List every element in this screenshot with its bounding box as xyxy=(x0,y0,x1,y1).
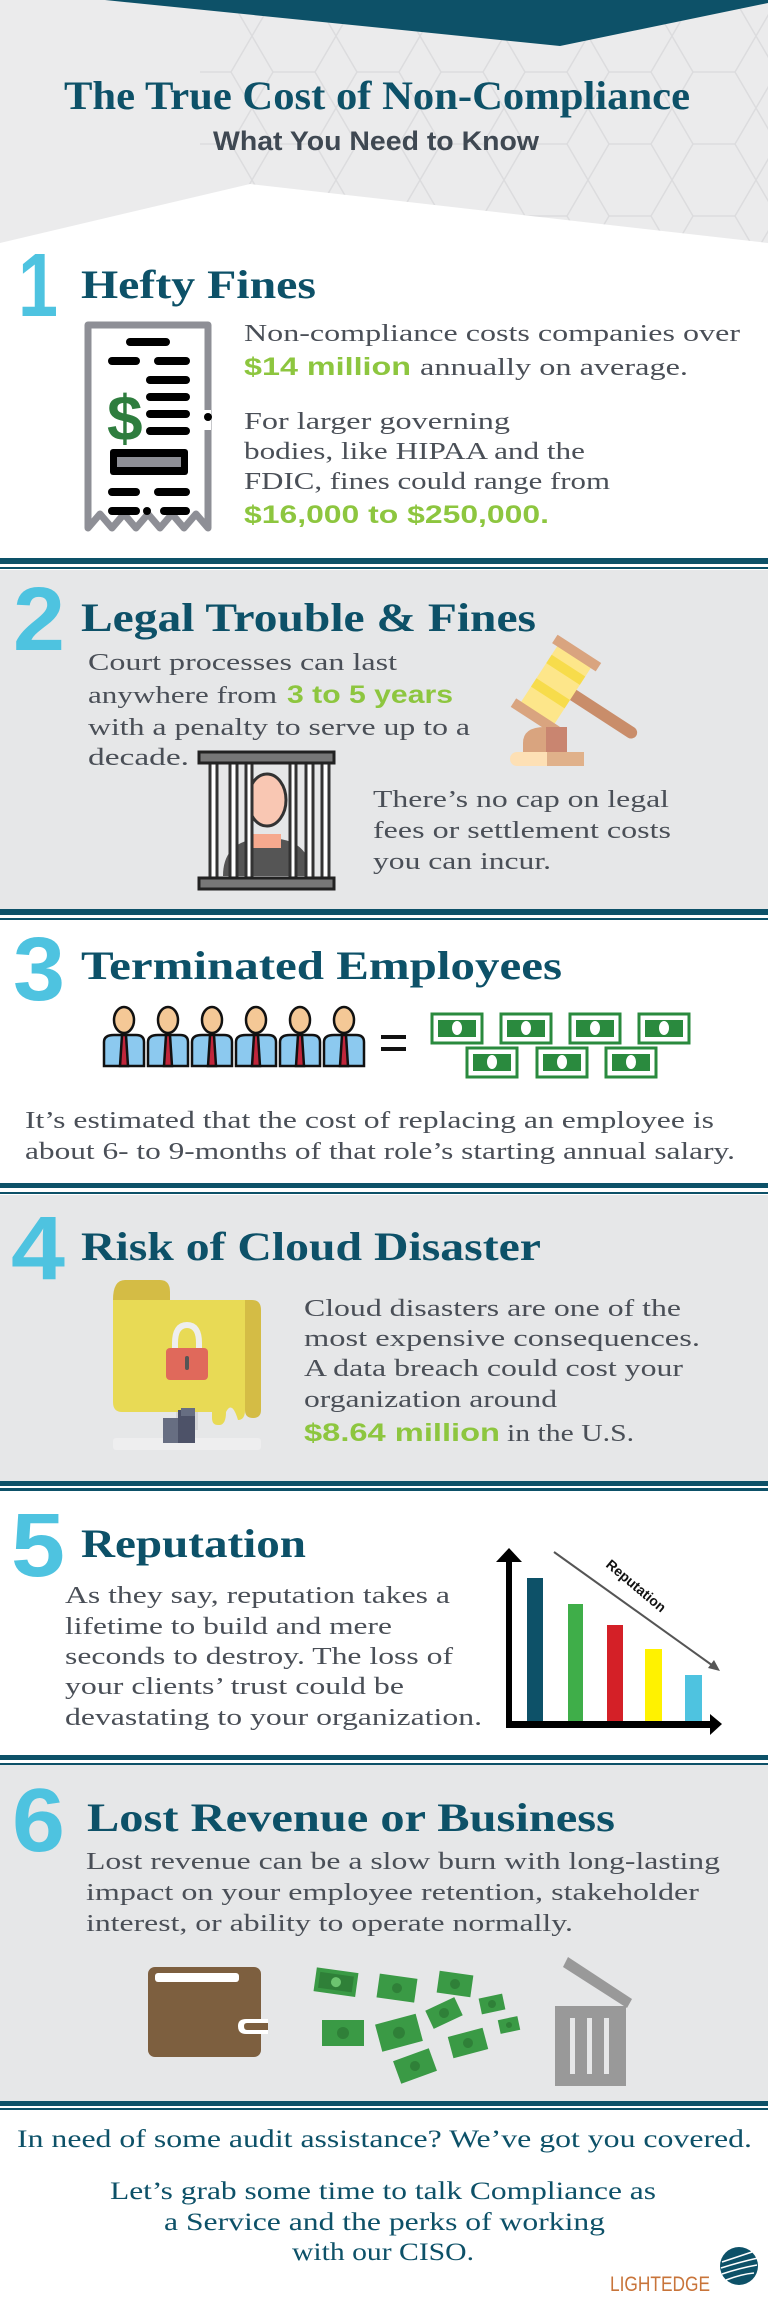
number 5: 5 xyxy=(11,1496,65,1596)
text block: reputation: seconds to destroy. The loss of xyxy=(65,1644,453,1670)
text block: reputation xyxy=(65,1583,482,1731)
text block: replacement cost: It’s estimated that the cost of replacing an employee is xyxy=(25,1108,714,1134)
title: The True Cost of Non-Compliance xyxy=(64,73,690,118)
text block: fines: $16,000 to $250,000. xyxy=(244,501,549,529)
text block: data breach: Cloud disasters are one of the xyxy=(304,1296,681,1322)
icon: jail xyxy=(199,752,334,889)
text block: fines: FDIC, fines could range from xyxy=(244,469,610,495)
text block: replacement cost: about 6- to 9-months of that role’s starting annual salary. xyxy=(25,1139,735,1165)
text block: reputation: your clients’ trust could be xyxy=(65,1674,404,1700)
text block: court: Court processes can last xyxy=(88,650,397,676)
footer: call to action: with our CISO. xyxy=(292,2239,474,2266)
text block: fines: annually on average. xyxy=(420,355,688,381)
text block: legal fees xyxy=(373,787,671,875)
icon: money stacks xyxy=(432,1014,689,1077)
icon: trash can xyxy=(555,1957,632,2086)
number 1: 1 xyxy=(18,236,58,336)
text block: data breach: A data breach could cost your xyxy=(304,1356,683,1382)
subtitle: What You Need to Know xyxy=(213,126,540,156)
number 2: 2 xyxy=(13,570,65,670)
equals sign xyxy=(381,1035,406,1051)
text block: data breach: $8.64 million xyxy=(304,1419,500,1447)
text block: reputation: lifetime to build and mere xyxy=(65,1614,392,1640)
heading: lost revenue: Lost Revenue or Business xyxy=(87,1795,615,1840)
number 4: 4 xyxy=(11,1199,65,1299)
text block: replacement cost xyxy=(25,1108,735,1165)
heading: cloud disaster: Risk of Cloud Disaster xyxy=(81,1224,541,1269)
text block: fines: For larger governing xyxy=(244,409,510,435)
icon: gavel xyxy=(510,635,659,773)
text block: court: anywhere from xyxy=(88,683,277,709)
footer: call to action: a Service and the perks of working xyxy=(164,2209,606,2236)
number 3: 3 xyxy=(13,920,65,1020)
text block: court: decade. xyxy=(88,745,189,771)
panel: reputation xyxy=(0,1491,768,1755)
text block: court: 3 to 5 years xyxy=(287,681,453,709)
header background xyxy=(0,0,768,250)
text block: lost revenue xyxy=(86,1849,720,1937)
text block: data breach: organization around xyxy=(304,1387,557,1413)
footer: call to action: Let’s grab some time to talk Compliance as xyxy=(110,2178,656,2205)
footer: call to action xyxy=(17,2126,752,2266)
text block: legal fees: fees or settlement costs xyxy=(373,818,671,844)
chart: declining reputation bars xyxy=(496,1548,722,1735)
text block: court xyxy=(88,650,470,771)
text block: fines: bodies, like HIPAA and the xyxy=(244,439,585,465)
heading: legal trouble: Legal Trouble & Fines xyxy=(81,595,536,640)
text block: legal fees: you can incur. xyxy=(373,849,551,875)
number 6: 6 xyxy=(12,1771,65,1871)
icon: wallet xyxy=(148,1967,268,2057)
text block: court: with a penalty to serve up to a xyxy=(88,715,470,741)
text block: reputation: devastating to your organization. xyxy=(65,1705,482,1731)
heading: hefty fines: Hefty Fines xyxy=(81,262,316,307)
panel: legal trouble xyxy=(0,570,768,909)
heading: reputation: Reputation xyxy=(81,1521,306,1566)
chart: declining reputation bars: Reputation xyxy=(603,1556,669,1615)
text block: lost revenue: impact on your employee retention, stakeholder xyxy=(86,1880,699,1906)
panel: lost revenue xyxy=(0,1765,768,2101)
logo: lightedge xyxy=(610,2247,758,2296)
text block: lost revenue: Lost revenue can be a slow burn with long-lasting xyxy=(86,1849,720,1875)
text block: data breach: most expensive consequences. xyxy=(304,1326,700,1352)
text block: reputation: As they say, reputation takes a xyxy=(65,1583,450,1609)
panel: terminated employees xyxy=(0,920,768,1182)
text block: data breach: in the U.S. xyxy=(507,1421,634,1447)
text block: fines: $14 million xyxy=(244,353,411,381)
panel: cloud disaster xyxy=(0,1195,768,1481)
icon: receipt: $ xyxy=(107,382,143,454)
text block: fines: Non-compliance costs companies over xyxy=(244,321,740,347)
icon: employees xyxy=(104,1007,364,1066)
icon: flying money xyxy=(314,1967,520,2084)
text block: legal fees: There’s no cap on legal xyxy=(373,787,669,813)
icon: receipt xyxy=(88,325,212,528)
text block: fines xyxy=(244,321,740,529)
text block: lost revenue: interest, or ability to operate normally. xyxy=(86,1911,573,1937)
heading: terminated employees: Terminated Employees xyxy=(81,943,562,988)
logo: lightedge: LIGHTEDGE xyxy=(610,2273,710,2296)
footer: call to action: In need of some audit assistance? We’ve got you covered. xyxy=(17,2126,752,2153)
panel: hefty fines xyxy=(0,236,768,558)
icon: locked folder xyxy=(113,1280,261,1450)
text block: data breach xyxy=(304,1296,700,1447)
